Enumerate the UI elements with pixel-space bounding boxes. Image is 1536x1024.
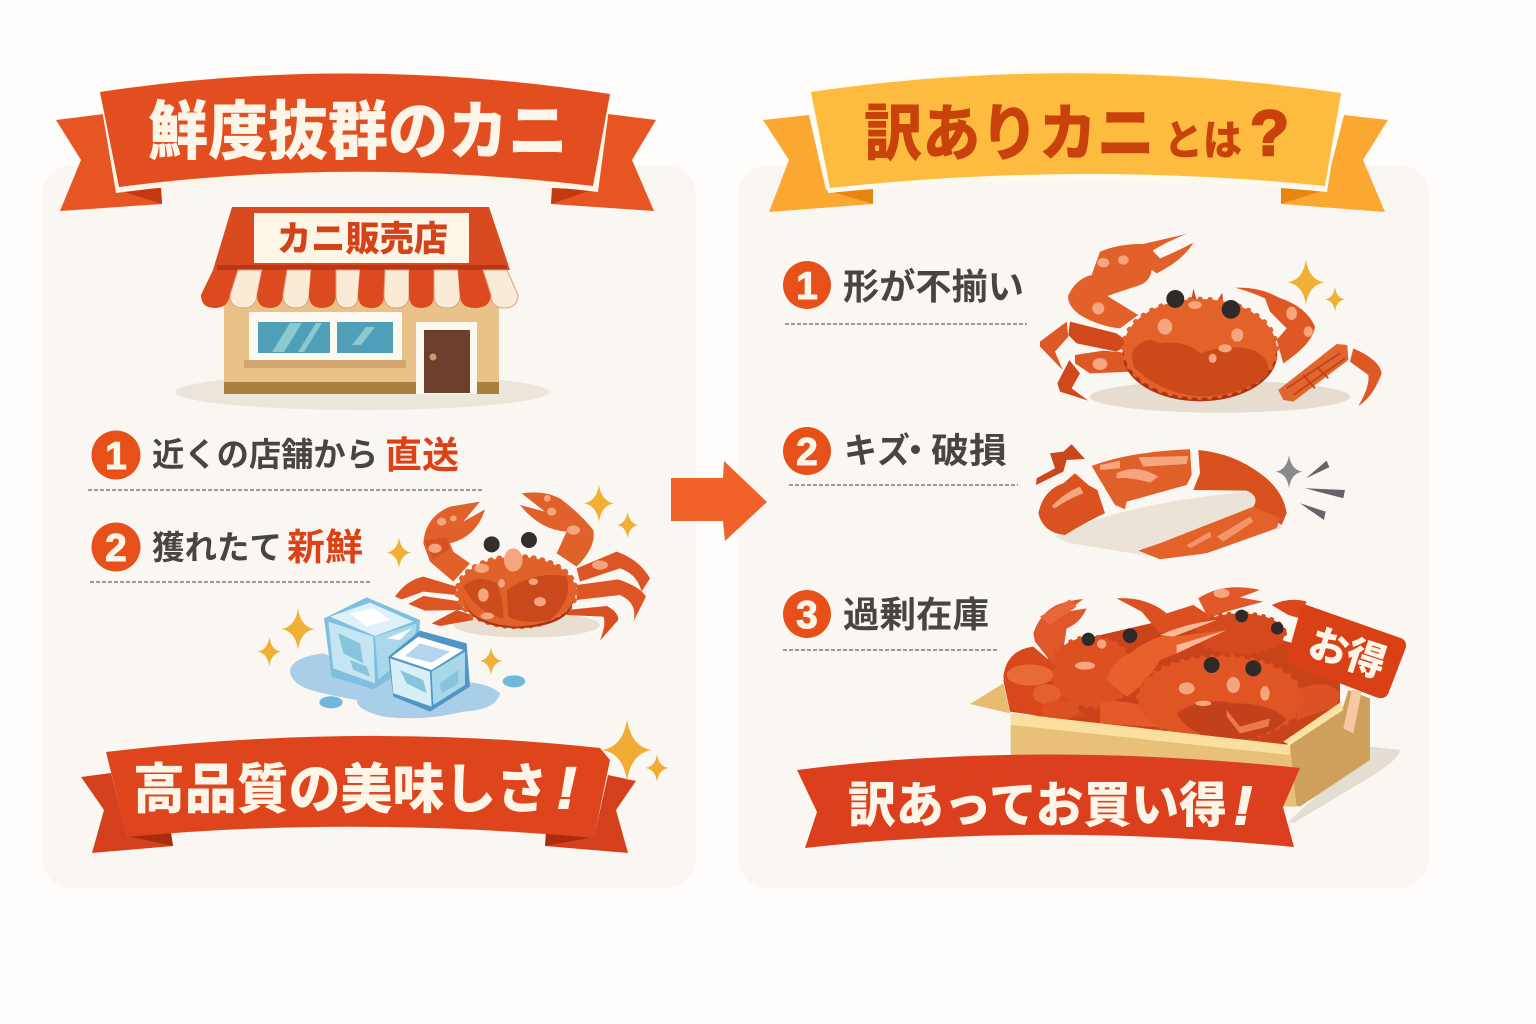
cardboard box: [1011, 690, 1370, 807]
list item 2: scratches and damage: [783, 427, 1007, 475]
heading ribbon: discounted crab: ?: [1250, 97, 1289, 169]
front crab: [1075, 589, 1340, 740]
shop sign: [254, 213, 469, 263]
building wall: [224, 296, 499, 394]
awning stripes: [201, 270, 518, 308]
panel: discounted crab background: [738, 165, 1429, 888]
list item 2: freshly caught: 新鮮: [287, 527, 363, 568]
closing ribbon: high quality: 高品質の美味しさ: [133, 760, 548, 820]
closing ribbon: good deal: [797, 754, 1300, 848]
list item 1: direct delivery: 直送: [385, 435, 459, 476]
list item 1: direct delivery: 近くの店舗から: [152, 436, 378, 473]
heading ribbon: discounted crab: [763, 71, 1388, 212]
heading ribbon: discounted crab: 訳ありカニ: [864, 100, 1155, 169]
crab mass: [1003, 613, 1340, 745]
list item 3: surplus stock: 過剰在庫: [843, 594, 989, 635]
awning roof: [213, 207, 510, 270]
list item 3: surplus stock: 3: [796, 594, 818, 637]
illustration: broken crab leg: [1036, 444, 1345, 559]
list item 2: freshly caught: 2: [105, 527, 127, 570]
closing ribbon: good deal: 訳あってお買い得: [848, 779, 1227, 833]
ice cubes and meltwater: [290, 597, 525, 718]
price sign: good deal: お得: [1303, 621, 1392, 687]
sparkles: [1288, 260, 1345, 312]
crab: [395, 492, 650, 641]
shop door: [416, 322, 477, 394]
illustration: fresh crab with ice: [258, 485, 650, 718]
illustration: irregular crab: [1040, 234, 1382, 413]
shop sign: カニ販売店: [277, 220, 448, 259]
list item 1: irregular shape: 1: [796, 265, 818, 308]
shop window: [244, 312, 406, 368]
closing ribbon: high quality: [81, 736, 636, 853]
list item 2: scratches and damage: ・: [898, 432, 933, 471]
price sign: good deal: [1287, 605, 1406, 733]
heading ribbon: fresh crab: [56, 72, 656, 211]
list item 1: direct delivery: [92, 430, 459, 480]
sparkles: [258, 485, 638, 675]
heading ribbon: discounted crab: とは: [1164, 117, 1242, 164]
illustration: box of crabs: [970, 587, 1406, 823]
panel: fresh crab background: [42, 165, 696, 888]
sparkles: closing ribbon: [602, 719, 668, 782]
heading ribbon: fresh crab: 鮮度抜群のカニ: [148, 96, 568, 168]
list item 2: scratches and damage: 2: [796, 431, 818, 474]
list item 2: freshly caught: 獲れたて: [152, 529, 282, 566]
arrow: [671, 461, 767, 541]
illustration: crab shop: [175, 207, 549, 410]
impact marks: [1276, 455, 1345, 520]
list item 3: surplus stock: [783, 590, 989, 638]
list item 2: scratches and damage: キズ: [844, 431, 910, 471]
list item 2: freshly caught: [92, 522, 363, 572]
list item 1: irregular shape: 形が不揃い: [843, 266, 1024, 307]
back crabs: [1003, 587, 1307, 720]
list item 2: scratches and damage: 破損: [931, 432, 1007, 471]
closing ribbon: good deal: !: [1234, 776, 1252, 836]
list item 1: direct delivery: 1: [105, 435, 127, 478]
closing ribbon: high quality: !: [557, 756, 576, 821]
list item 1: irregular shape: [783, 261, 1024, 309]
